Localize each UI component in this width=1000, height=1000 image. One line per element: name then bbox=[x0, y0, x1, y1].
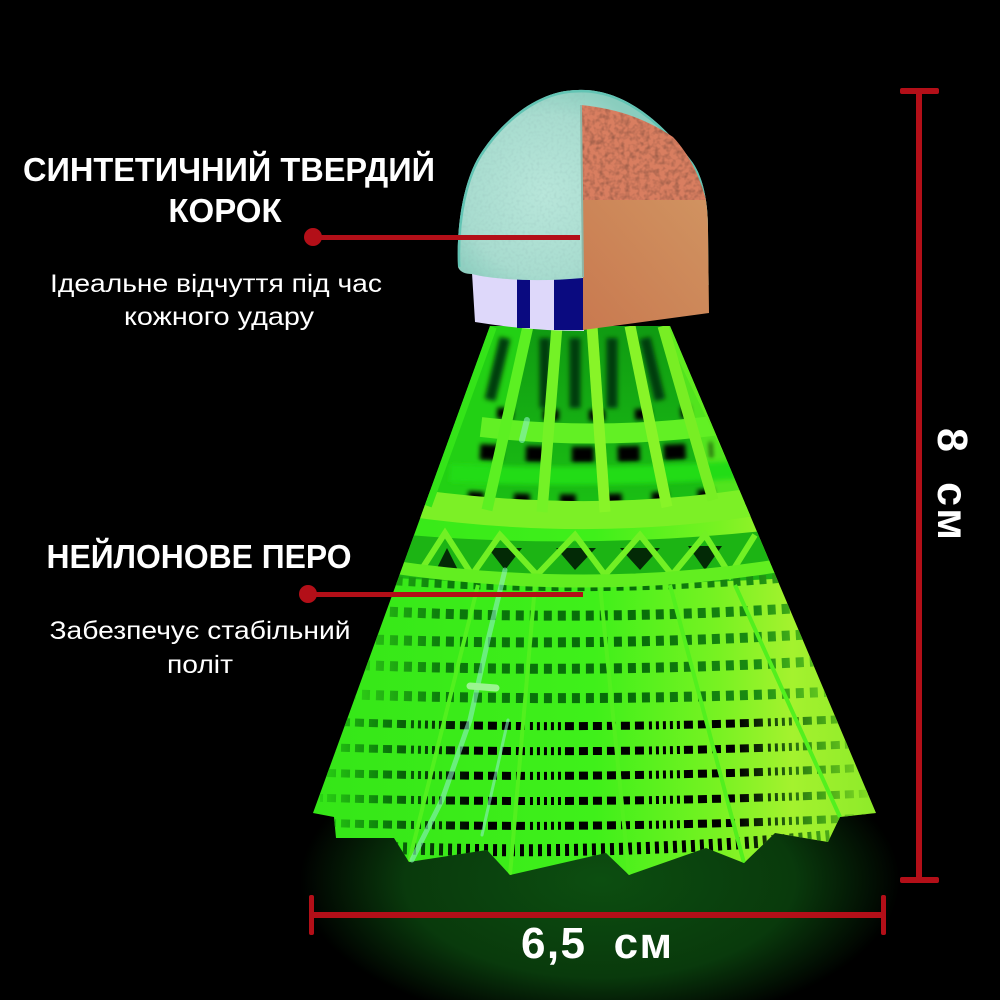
leader: nylon feather bbox=[299, 585, 583, 603]
width label: 6,5 см bbox=[521, 919, 672, 968]
width dimension line bbox=[309, 895, 886, 935]
shuttlecock nylon skirt bbox=[292, 326, 900, 885]
upper cork layer bbox=[582, 105, 706, 200]
mesh body bbox=[292, 326, 900, 885]
outer teal shell bbox=[450, 85, 715, 285]
light streaks bbox=[412, 420, 527, 860]
collar ribs bbox=[425, 326, 755, 512]
text: nylon description: Забезпечує стабільний bbox=[50, 617, 350, 645]
text: cork description: Ідеальне відчуття під час bbox=[50, 270, 382, 298]
leader: cork bbox=[304, 228, 580, 246]
heading: nylon feather: НЕЙЛОНОВЕ ПЕРО bbox=[46, 537, 352, 575]
heading: cork bbox=[23, 150, 435, 229]
heading: cork: СИНТЕТИЧНИЙ ТВЕРДИЙ bbox=[23, 150, 435, 188]
triangle band bbox=[395, 530, 790, 584]
heading: cork: КОРОК bbox=[168, 192, 282, 229]
height dimension line bbox=[900, 88, 939, 883]
skirt seams bbox=[409, 585, 840, 875]
upper open skirt bbox=[421, 326, 750, 516]
mesh holes bbox=[292, 566, 900, 850]
cork cutaway dome bbox=[450, 85, 715, 331]
upper band bbox=[481, 425, 720, 434]
wide band bbox=[405, 498, 778, 515]
lower band bbox=[385, 562, 800, 581]
text: cork description: кожного удару bbox=[124, 303, 315, 331]
text: cork description bbox=[50, 270, 382, 331]
text: nylon description: політ bbox=[167, 651, 234, 679]
text: nylon description bbox=[50, 617, 350, 679]
lower cork layer bbox=[583, 200, 710, 331]
cork ring bbox=[472, 273, 584, 331]
cork divider bbox=[581, 105, 583, 277]
floor reflection glow bbox=[270, 810, 920, 1000]
height label: 8 см bbox=[928, 428, 976, 540]
